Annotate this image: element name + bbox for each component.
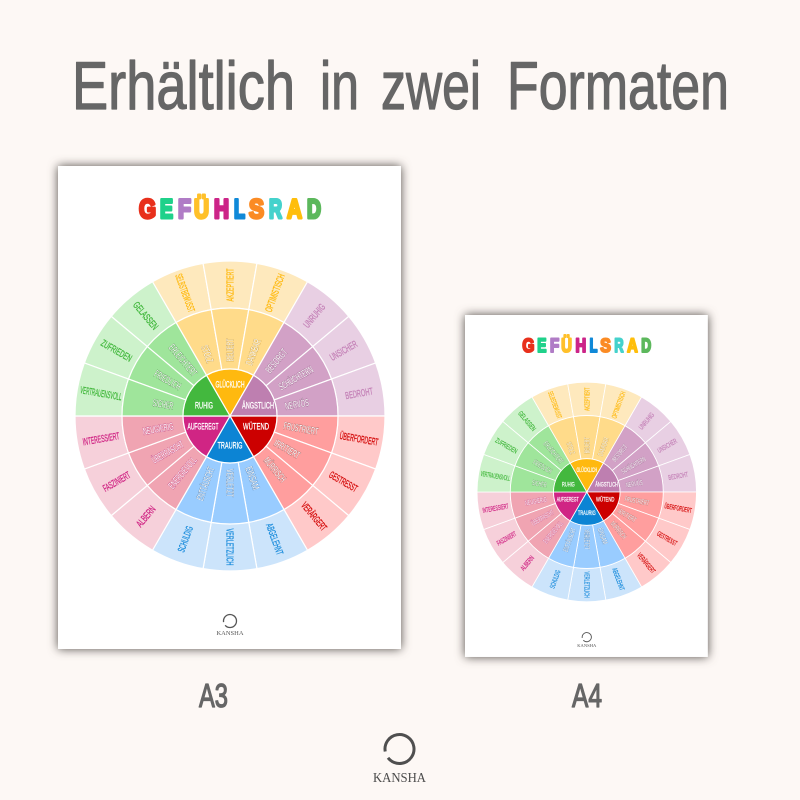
poster title A3: E bbox=[160, 194, 173, 224]
label A4: A4 bbox=[572, 677, 602, 714]
sector: Traurig A4: TRAURIG bbox=[578, 510, 596, 517]
poster title A3: S bbox=[249, 194, 264, 224]
poster title A4: Ü bbox=[561, 336, 572, 357]
label A3: A3 bbox=[199, 677, 228, 714]
sector: Ruhig A4: FRIEDLICH bbox=[531, 458, 553, 476]
sector: Wütend: ÜBERFORDERT bbox=[339, 430, 379, 449]
poster title A3: F bbox=[178, 194, 191, 224]
sector: Glücklich A4: AKZEPTIERT bbox=[583, 387, 591, 411]
sector: Glücklich A4: GLÜCKLICH bbox=[577, 466, 597, 474]
sector: Traurig A4: VERLETZLICH bbox=[582, 572, 590, 598]
sector: Traurig A4: ABGELEHNT bbox=[610, 567, 626, 592]
sector: Ängstlich A4: BEDROHT bbox=[668, 471, 689, 482]
poster title A4: E bbox=[537, 336, 546, 357]
brand logo bbox=[373, 732, 427, 786]
poster logo A3 bbox=[216, 613, 244, 637]
poster title A3: Ü bbox=[194, 194, 209, 224]
sector: Ruhig A4 bbox=[475, 396, 595, 506]
sector: Traurig: VERLETZLICH bbox=[224, 528, 234, 566]
sector: Ruhig bbox=[73, 280, 242, 436]
poster title A4 bbox=[522, 336, 651, 357]
sector: Wütend A4: ÜBERFORDERT bbox=[664, 502, 693, 515]
sector: Wütend bbox=[218, 396, 387, 552]
sector: Aufgeregt: AUFGEREGT bbox=[188, 422, 219, 432]
poster title A4: L bbox=[590, 336, 598, 357]
sector: Aufgeregt: NEUGIERIG bbox=[142, 422, 175, 438]
heading: Formaten bbox=[507, 48, 729, 124]
sector: Aufgeregt A4: FASZINIERT bbox=[495, 530, 518, 548]
sector: Wütend: GESTRESST bbox=[327, 470, 359, 495]
sector: Glücklich: SELBSTBEWUSST bbox=[172, 273, 196, 314]
sector: Wütend A4: WÜTEND bbox=[596, 496, 614, 504]
sector: Ängstlich A4: SCHÜCHTERN bbox=[620, 455, 647, 476]
sector: Ruhig A4: ERLEICHTERT bbox=[541, 440, 565, 466]
sector: Traurig A4: EINSAM bbox=[596, 527, 609, 545]
poster title A3: A bbox=[287, 194, 302, 224]
sector: Wütend A4: VERÄRGERT bbox=[635, 552, 657, 575]
sector: Traurig: EINSAM bbox=[242, 465, 261, 492]
heading bbox=[72, 48, 729, 124]
sector: Aufgeregt A4: ÜBERRASCHT bbox=[530, 508, 556, 528]
sector: Aufgeregt A4 bbox=[475, 478, 595, 588]
heading: Erhältlich bbox=[72, 48, 295, 124]
poster title A3: H bbox=[214, 194, 229, 224]
sector: Ängstlich: BESORGT bbox=[264, 347, 290, 376]
poster logo A3: KANSHA bbox=[216, 630, 244, 637]
sector: Glücklich A4: BELIEBT bbox=[583, 437, 591, 453]
sector: Aufgeregt A4: ALBERN bbox=[519, 554, 536, 572]
sector: Glücklich A4 bbox=[531, 382, 642, 492]
emotion wheel A4 bbox=[475, 382, 698, 602]
sector: Ängstlich A4: ÄNGSTLICH bbox=[595, 481, 618, 489]
sector: Ängstlich: ÄNGSTLICH bbox=[242, 400, 274, 412]
heading: zwei bbox=[381, 48, 481, 124]
sector: Aufgeregt A4: ENERGIEVOLL bbox=[542, 520, 565, 545]
sector: Wütend: IRRITIERT bbox=[272, 438, 302, 462]
heading: in bbox=[320, 48, 359, 124]
sector: Glücklich A4: DANKBAR bbox=[597, 437, 611, 457]
panel: A3 poster bbox=[58, 166, 401, 649]
sector: Wütend: VERÄRGERT bbox=[298, 500, 329, 534]
sector: Glücklich bbox=[152, 261, 308, 416]
sector: Ruhig A4: VERTRAUENSVOLL bbox=[480, 470, 511, 483]
sector: Ruhig A4: RUHIG bbox=[562, 482, 575, 489]
sector: Glücklich: OPTIMISTISCH bbox=[264, 273, 288, 314]
sector: Aufgeregt: INTERESSIERT bbox=[82, 431, 120, 448]
sector: Ängstlich A4: NERVÖS bbox=[625, 479, 643, 490]
sector: Wütend A4: MÜRRISCH bbox=[609, 520, 628, 541]
sector: Ängstlich bbox=[218, 280, 387, 436]
sector: Wütend: MÜRRISCH bbox=[261, 455, 289, 485]
sector: Ruhig A4: ZUFRIEDEN bbox=[494, 437, 519, 456]
sector: Wütend A4: FRUSTRIERT bbox=[624, 495, 650, 507]
poster title A3: G bbox=[139, 194, 156, 224]
poster title A3: L bbox=[234, 194, 245, 224]
poster sheet A3 bbox=[58, 166, 401, 649]
poster sheet A4 bbox=[465, 315, 708, 657]
sector: Ängstlich A4: BESORGT bbox=[610, 443, 630, 463]
sector: Aufgeregt A4: AUFGEREGT bbox=[557, 497, 579, 504]
sector: Ruhig: GELASSEN bbox=[130, 300, 160, 332]
poster title A4: R bbox=[614, 336, 624, 357]
sector: Ruhig: SICHER bbox=[152, 398, 174, 412]
sector: Wütend A4: IRRITIERT bbox=[616, 507, 638, 524]
poster title A3: D bbox=[307, 194, 321, 224]
sector: Traurig bbox=[152, 416, 308, 571]
brand logo: KANSHA bbox=[373, 771, 427, 786]
poster title A4: A bbox=[627, 336, 638, 357]
sector: Traurig A4: VERLETZT bbox=[582, 530, 590, 550]
sector: Aufgeregt: ALBERN bbox=[135, 504, 158, 530]
sector: Ruhig A4: SICHER bbox=[531, 479, 547, 489]
sector: Traurig: SCHULDIG bbox=[176, 525, 196, 554]
sector: Glücklich A4: STOLZ bbox=[564, 441, 576, 456]
poster logo A4: KANSHA bbox=[577, 643, 597, 648]
sector: Ruhig: ZUFRIEDEN bbox=[99, 338, 134, 365]
sector: Ängstlich: UNSICHER bbox=[328, 339, 360, 364]
poster title A4: S bbox=[600, 336, 611, 357]
sector: Ruhig: FRIEDLICH bbox=[152, 369, 182, 393]
sector: Ruhig: VERTRAUENSVOLL bbox=[79, 385, 123, 403]
sector: Ängstlich: SCHÜCHTERN bbox=[277, 364, 316, 393]
sector: Wütend A4 bbox=[578, 478, 698, 588]
sector: Ängstlich: BEDROHT bbox=[344, 386, 374, 402]
sector: Traurig A4: ENTTÄUSCHT bbox=[562, 527, 578, 553]
sector: Traurig: VERLETZT bbox=[224, 469, 234, 497]
poster title A4: D bbox=[641, 336, 651, 357]
sector: Traurig A4: SCHULDIG bbox=[548, 569, 563, 590]
sector: Aufgeregt A4: INTERESSIERT bbox=[482, 502, 509, 515]
sector: Ängstlich: NERVÖS bbox=[284, 397, 310, 413]
sector: Ängstlich A4: UNSICHER bbox=[656, 437, 679, 455]
sector: Glücklich: GLÜCKLICH bbox=[216, 380, 245, 390]
sector: Ruhig: RUHIG bbox=[195, 400, 213, 412]
sector: Glücklich A4: OPTIMISTISCH bbox=[610, 390, 628, 420]
sector: Ängstlich A4 bbox=[578, 396, 698, 506]
sector: Ängstlich: UNRUHIG bbox=[302, 302, 328, 331]
poster title A4: F bbox=[550, 336, 559, 357]
poster title A3: R bbox=[269, 194, 282, 224]
sector: Aufgeregt: FASZINIERT bbox=[101, 470, 133, 495]
poster title A4: H bbox=[575, 336, 586, 357]
sector: Traurig A4 bbox=[531, 492, 642, 602]
sector: Aufgeregt: ENERGIEVOLL bbox=[167, 455, 200, 491]
poster title A3 bbox=[139, 194, 321, 224]
poster title A4: G bbox=[522, 336, 534, 357]
sector: Aufgeregt bbox=[73, 396, 242, 552]
sector: Traurig: ABGELEHNT bbox=[263, 522, 285, 557]
sector: Wütend: WÜTEND bbox=[243, 422, 269, 432]
sector: Glücklich: AKZEPTIERT bbox=[226, 268, 236, 302]
sector: Glücklich: STOLZ bbox=[198, 344, 215, 365]
emotion wheel A3 bbox=[73, 261, 387, 571]
sector: Ruhig: ERLEICHTERT bbox=[166, 343, 199, 379]
sector: Traurig: TRAURIG bbox=[218, 440, 242, 452]
sector: Ruhig A4: GELASSEN bbox=[516, 410, 537, 433]
sector: Glücklich: DANKBAR bbox=[244, 338, 264, 367]
sector: Aufgeregt: ÜBERRASCHT bbox=[150, 438, 186, 466]
sector: Traurig: ENTTÄUSCHT bbox=[194, 465, 217, 502]
sector: Wütend A4: GESTRESST bbox=[655, 530, 679, 548]
sector: Ängstlich A4: UNRUHIG bbox=[637, 411, 656, 431]
sector: Glücklich: BELIEBT bbox=[226, 338, 236, 362]
panel: A4 poster bbox=[465, 315, 708, 657]
sector: Glücklich A4: SELBSTBEWUSST bbox=[546, 390, 563, 420]
poster logo A4 bbox=[577, 632, 597, 648]
sector: Aufgeregt A4: NEUGIERIG bbox=[524, 496, 547, 507]
sector: Wütend: FRUSTRIERT bbox=[283, 421, 319, 438]
